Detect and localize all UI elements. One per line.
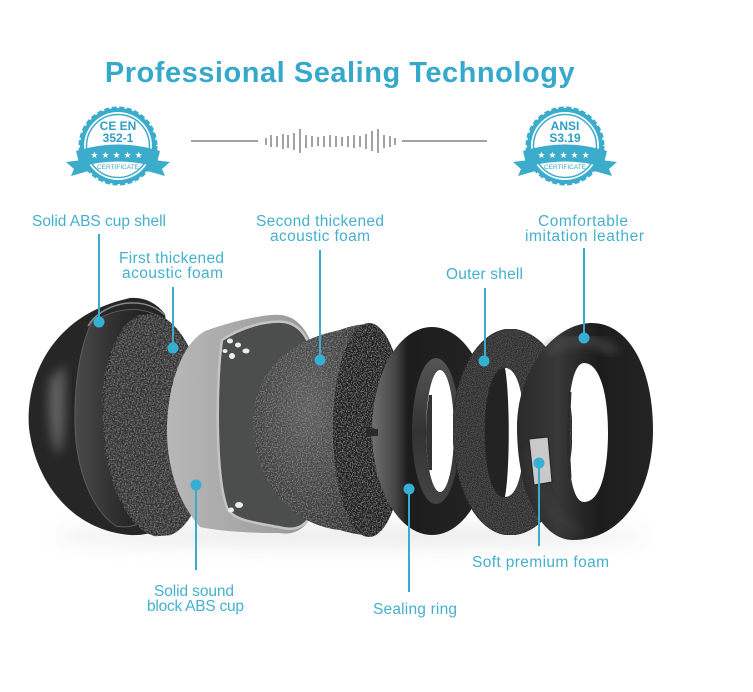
label: Comfortable imitation leather: Comfortable	[538, 213, 628, 230]
part: leather cushion	[517, 323, 653, 540]
label: First thickened acoustic foam: First thickened	[119, 250, 224, 267]
part: outer shell	[453, 329, 572, 535]
floor shadow	[50, 527, 650, 545]
badge: CE EN 352-1: 352-1	[103, 131, 134, 145]
label: Outer shell	[446, 266, 523, 366]
part: sealing ring	[366, 327, 492, 535]
label: Second thickened acoustic foam: Second thickened	[256, 213, 384, 230]
badge: CE EN 352-1: CE EN	[100, 119, 136, 133]
label: Soft premium foam	[472, 458, 609, 571]
label: Solid sound block ABS cup: block ABS cup	[147, 598, 244, 615]
label: Comfortable imitation leather: imitation leather	[525, 228, 644, 245]
label: Solid ABS cup shell	[32, 213, 166, 328]
part: grey ABS cup	[167, 315, 310, 534]
part: first foam	[95, 311, 215, 539]
label: Second thickened acoustic foam	[256, 213, 384, 366]
label: Sealing ring	[373, 484, 457, 618]
label: Sealing ring: Sealing ring	[373, 601, 457, 618]
label: Comfortable imitation leather	[525, 213, 644, 344]
label: Solid sound block ABS cup	[147, 480, 244, 615]
badge: ANSI S3.19: CERTIFICATE	[544, 164, 587, 171]
part: ABS cup shell	[29, 298, 190, 535]
badge: CE EN 352-1: ★★★★★	[90, 151, 146, 161]
badge: ANSI S3.19: ★★★★★	[537, 151, 593, 161]
part: soft premium foam	[529, 437, 552, 485]
label: Soft premium foam: Soft premium foam	[472, 554, 609, 571]
badge: ANSI S3.19	[513, 108, 617, 184]
label: Solid ABS cup shell: Solid ABS cup shell	[32, 213, 166, 230]
badge: CE EN 352-1: CERTIFICATE	[97, 164, 140, 171]
part: second foam	[253, 323, 405, 537]
label: First thickened acoustic foam	[119, 250, 224, 354]
badge: ANSI S3.19: ANSI	[551, 119, 579, 133]
label: Solid sound block ABS cup: Solid sound	[154, 583, 234, 600]
waveform divider	[191, 129, 487, 153]
title: Professional Sealing Technology	[105, 57, 575, 89]
label: First thickened acoustic foam: acoustic foam	[122, 265, 223, 282]
badge: CE EN 352-1	[66, 108, 170, 184]
label: Outer shell: Outer shell	[446, 266, 523, 283]
badge: ANSI S3.19: S3.19	[549, 131, 581, 145]
label: Second thickened acoustic foam: acoustic foam	[270, 228, 370, 245]
